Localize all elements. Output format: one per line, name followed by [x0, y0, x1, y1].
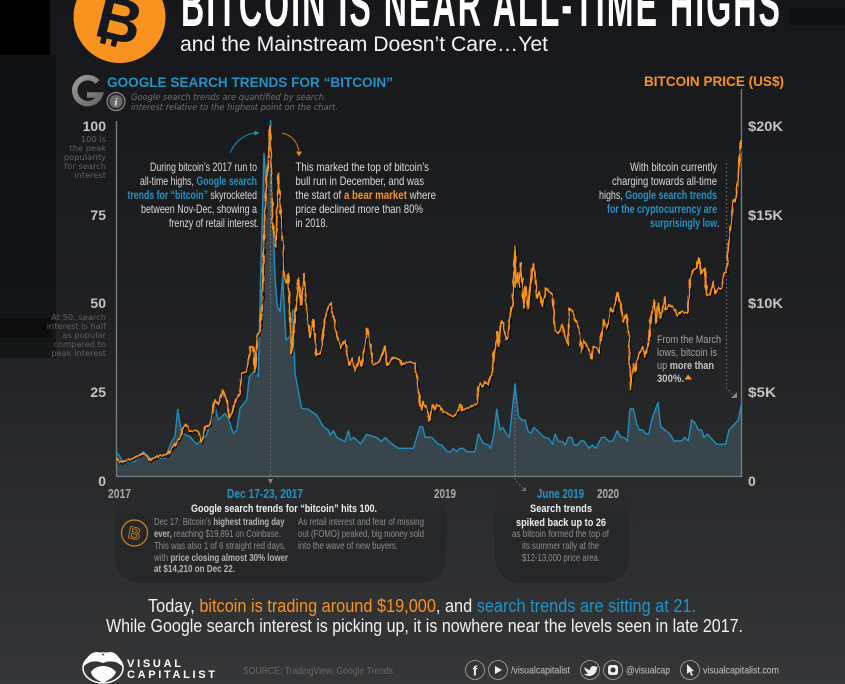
left axis labels: 100 — [83, 118, 106, 134]
subtitle: and the Mainstream Doesn’t Care…Yet — [180, 33, 548, 56]
panel text: google hits 100: Google search trends for “bitcoin” hits 100. — [191, 503, 377, 515]
annotation: up 300 percent: From the March — [657, 334, 721, 346]
arrow: orange curved — [282, 133, 302, 156]
annotation: current highs: With bitcoin currently — [630, 161, 717, 174]
panel text: highest trading day: at $14,210 on Dec 22. — [154, 564, 235, 575]
panel text: fomo: into the wave of new buyers. — [298, 541, 398, 552]
note: 50 is half: as popular — [62, 330, 107, 340]
x axis year labels: 2017 — [108, 486, 131, 501]
panel text: fomo: out (FOMO) peaked, big money sold — [298, 529, 424, 540]
social: facebook and youtube: f — [473, 662, 478, 678]
panel text: search trends spiked: $12-13,000 price area. — [522, 553, 600, 564]
panel text: fomo — [298, 517, 424, 552]
annotation: current highs — [599, 161, 720, 230]
heading: google search trends: GOOGLE SEARCH TRENDS FOR “BITCOIN” — [107, 74, 393, 90]
social: website: visualcapitalist.com — [703, 664, 779, 676]
search trends area — [116, 121, 742, 476]
annotation: 2017 run: frenzy of retail interest. — [169, 217, 259, 230]
right axis labels: $5K — [748, 384, 776, 400]
social: twitter and instagram — [580, 660, 670, 680]
social: twitter and instagram: @visualcap — [626, 664, 670, 676]
logo: visual capitalist: VISUAL — [127, 658, 181, 670]
right axis labels: $20K — [748, 118, 783, 134]
conclusion text: While Google search interest is picking up, it is nowhere near the levels seen in late 2017. — [106, 616, 743, 636]
panel text: highest trading day: This was also 1 of 6 straight red days, — [154, 541, 286, 552]
panel text: search trends spiked: Search trends — [530, 503, 592, 515]
chart: search trends and price — [116, 89, 742, 490]
axes — [116, 89, 742, 476]
social: facebook and youtube — [466, 660, 570, 680]
conclusion text: Today, bitcoin is trading around $19,000, and search trends are sitting at 21. — [148, 596, 696, 616]
annotation: top of bull run: in 2018. — [296, 217, 328, 230]
note: 50 is half — [47, 312, 107, 358]
x axis year labels — [108, 486, 619, 501]
social: facebook and youtube: /visualcapitalist — [511, 664, 570, 676]
panel text: search trends spiked: its summer rally at the — [522, 541, 599, 552]
note: 100 is peak: popularity — [64, 152, 106, 162]
left axis labels: 50 — [90, 295, 106, 311]
panel text: search trends spiked: as bitcoin formed the top of — [512, 529, 609, 540]
note: 50 is half: compared to — [53, 339, 106, 349]
annotation: current highs: charging towards all-time — [612, 175, 717, 188]
annotation: up 300 percent: 300%. — [657, 373, 684, 385]
left axis labels — [83, 118, 106, 489]
panel: dec 2017 — [115, 482, 446, 583]
heading: bitcoin price: BITCOIN PRICE (US$) — [644, 73, 784, 89]
note: 100 is peak: 100 is — [81, 134, 106, 144]
icon: bitcoin logo — [74, 0, 166, 63]
right axis labels — [748, 118, 783, 489]
annotation: current highs: highs, Google search trends — [599, 189, 717, 202]
annotation: current highs: surprisingly low. — [650, 217, 720, 230]
note: how search trends are quantified: Google search trends are quantified by search — [131, 93, 324, 103]
right axis labels: 0 — [748, 473, 756, 489]
dotted guide lines — [270, 130, 735, 490]
annotation: top of bull run — [296, 161, 436, 230]
panel text: highest trading day — [153, 517, 288, 575]
icon: info — [107, 92, 125, 110]
note: 100 is peak: the peak — [69, 143, 106, 153]
icon: info: i — [114, 96, 118, 108]
panel text: fomo: As retail interest and fear of missing — [298, 517, 424, 528]
annotation: 2017 run — [128, 161, 259, 230]
annotation: up 300 percent: lows, bitcoin is — [657, 347, 717, 359]
note: 50 is half: interest is half — [47, 321, 107, 331]
x axis year labels: 2020 — [597, 486, 619, 501]
note: 50 is half: At 50, search — [51, 312, 106, 322]
heading: dec 17-23 2017: Dec 17-23, 2017 — [227, 486, 303, 501]
annotation: top of bull run: price declined more than 80% — [296, 203, 423, 216]
search trends line — [116, 121, 742, 463]
social: website — [680, 660, 779, 680]
source: SOURCE: TradingView, Google Trends — [243, 666, 393, 677]
annotation: top of bull run: This marked the top of bitcoin’s — [296, 161, 429, 174]
annotation: top of bull run: the start of a bear market where — [296, 189, 436, 202]
note: 50 is half: peak interest — [51, 348, 107, 358]
annotation: 2017 run: During bitcoin’s 2017 run to — [150, 161, 257, 174]
markers: small triangles — [268, 392, 737, 491]
left axis labels: 25 — [90, 384, 106, 400]
right axis labels: $15K — [748, 207, 783, 223]
x axis year labels: 2019 — [434, 486, 456, 501]
note: 100 is peak — [64, 134, 107, 180]
panel: june 2019 — [495, 482, 629, 583]
icon: google G — [75, 78, 100, 104]
logo: visual capitalist: CAPITALIST — [127, 669, 215, 681]
left axis labels: 0 — [98, 473, 106, 489]
annotation: up 300 percent: up more than — [657, 360, 714, 372]
heading: june 2019: June 2019 — [537, 486, 584, 501]
panel text: highest trading day: Dec 17: Bitcoin’s highest trading day — [154, 517, 285, 528]
conclusion text — [106, 596, 743, 636]
panel text: search trends spiked: spiked back up to 26 — [516, 517, 606, 529]
panel text: highest trading day: with price closing almost 30% lower — [153, 553, 288, 564]
annotation: top of bull run: bull run in December, and was — [296, 175, 424, 188]
arrow: blue curved — [230, 130, 260, 153]
annotation: 2017 run: all-time highs, Google search — [140, 175, 257, 188]
note: how search trends are quantified: interest relative to the highest point on the chart. — [131, 103, 338, 113]
right axis labels: $10K — [748, 295, 783, 311]
annotation: current highs: for the cryptocurrency are — [607, 203, 717, 216]
annotation: 2017 run: between Nov-Dec, showing a — [141, 203, 257, 216]
panel text: highest trading day: ever, reaching $19,891 on Coinbase. — [154, 529, 281, 540]
note: 100 is peak: interest — [74, 170, 107, 180]
annotation: 2017 run: trends for “bitcoin” skyrocketed — [128, 189, 257, 202]
bitcoin price line — [116, 127, 742, 464]
icon: bitcoin outline: B — [126, 523, 142, 544]
left axis labels: 75 — [90, 207, 106, 223]
annotation: up 300 percent — [657, 334, 721, 385]
icon: bitcoin outline — [122, 520, 148, 546]
note: how search trends are quantified — [131, 93, 338, 113]
logo: visual capitalist — [83, 652, 215, 683]
note: 100 is peak: for search — [64, 161, 106, 171]
panel text: search trends spiked — [512, 503, 609, 564]
